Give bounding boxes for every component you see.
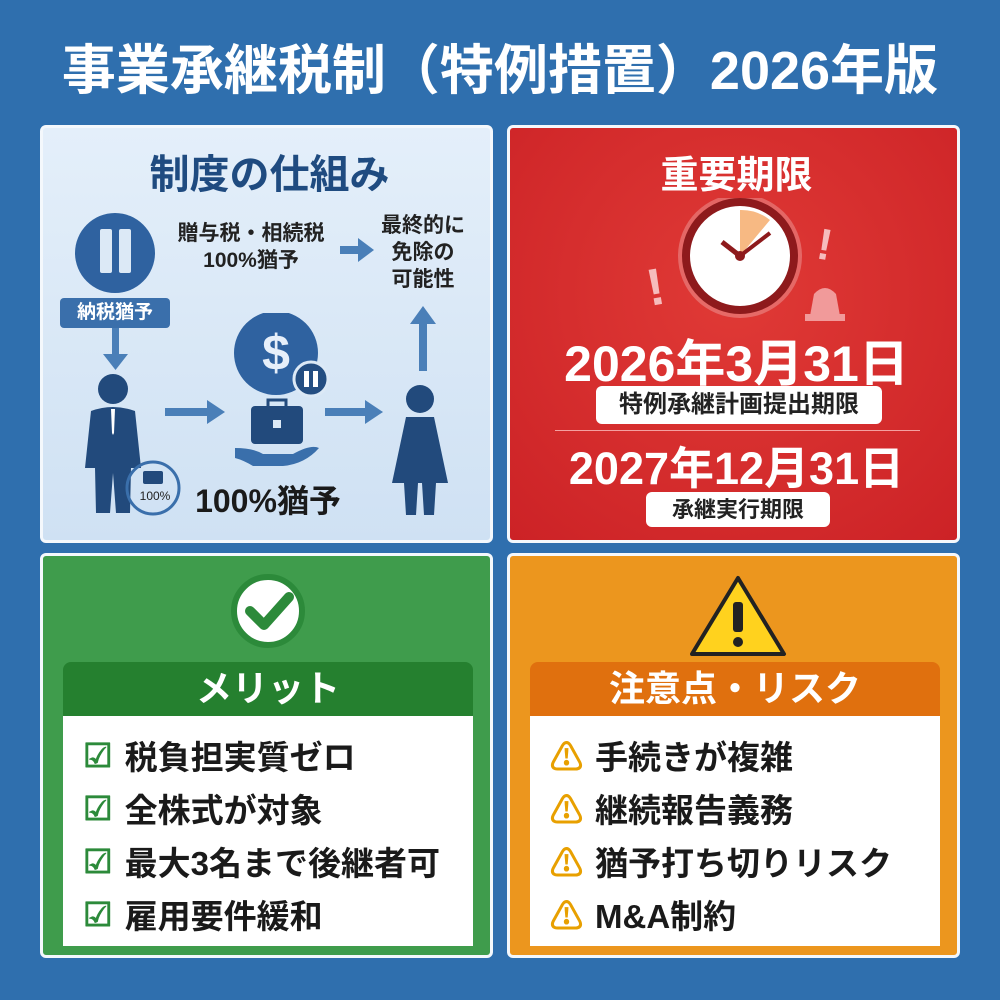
label: execution deadline: 承継実行期限 <box>672 497 804 522</box>
icon: businessman <box>85 374 180 516</box>
arrow: right 2 <box>325 400 383 424</box>
label: execution deadline <box>646 492 830 527</box>
date 1: 2026年3月31日 <box>564 336 909 392</box>
list: risks: ⚠ <box>550 845 583 882</box>
icon: warning triangle <box>690 576 786 656</box>
heading: mechanism: 制度の仕組み <box>150 153 390 197</box>
text: gift/inheritance tax: 贈与税・相続税 <box>178 222 324 245</box>
list: merits: ☑ <box>83 790 113 826</box>
icon: clock with alerts <box>642 198 845 321</box>
panel: deadlines <box>507 125 960 543</box>
header: merits: メリット <box>196 668 340 709</box>
list: merits: ☑ <box>83 842 113 880</box>
icon: clock with alerts: ! <box>642 258 669 318</box>
panel: risks <box>507 553 960 958</box>
header: risks <box>530 662 940 716</box>
header: merits <box>63 662 473 716</box>
icon: dollar coin: $ <box>262 325 290 381</box>
list: risks: ⚠ <box>550 792 583 829</box>
text: 100% deferral: 100%猶予 <box>195 483 341 519</box>
list: merits <box>63 716 473 946</box>
icon: briefcase in hand <box>235 398 319 466</box>
arrow: down <box>103 328 128 370</box>
icon: check circle <box>231 574 305 648</box>
label: tax deferral <box>60 298 170 328</box>
list: merits: 税負担実質ゼロ <box>125 739 356 776</box>
arrow: up <box>410 306 436 371</box>
label: plan submission <box>596 386 882 424</box>
icon: clock with alerts: ! <box>813 220 836 270</box>
heading: deadlines: 重要期限 <box>660 155 812 197</box>
text: exemption possibility: 最終的に <box>381 214 465 237</box>
list: risks: M&A制約 <box>595 898 736 935</box>
label: tax deferral: 納税猶予 <box>77 302 153 323</box>
list: merits: 全株式が対象 <box>125 792 323 829</box>
header: risks: 注意点・リスク <box>609 668 861 709</box>
list: merits: 雇用要件緩和 <box>125 898 323 935</box>
text: gift/inheritance tax <box>178 222 324 272</box>
list: risks: 猶予打ち切りリスク <box>595 845 892 882</box>
panel: merits <box>40 553 493 958</box>
icon: dollar coin <box>234 313 326 395</box>
icon: businessman: 100% <box>140 489 171 503</box>
list: risks: ⚠ <box>550 739 583 776</box>
arrow: right 1 <box>165 400 225 424</box>
list: merits: 最大3名まで後継者可 <box>125 845 440 882</box>
arrow: right top <box>340 238 374 262</box>
title: 事業承継税制（特例措置）2026年版 <box>62 41 938 101</box>
date 2: 2027年12月31日 <box>569 443 904 494</box>
text: gift/inheritance tax: 100%猶予 <box>203 249 299 272</box>
list: risks: 手続きが複雑 <box>595 739 793 776</box>
list: risks <box>530 716 940 946</box>
list: risks: ⚠ <box>550 898 583 935</box>
list: risks: 継続報告義務 <box>595 792 793 829</box>
text: exemption possibility <box>381 214 465 291</box>
list: merits: ☑ <box>83 736 113 774</box>
list: merits: ☑ <box>83 896 113 932</box>
panel: mechanism <box>40 125 493 543</box>
icon: pause circle <box>75 213 155 293</box>
text: exemption possibility: 免除の <box>392 241 454 264</box>
icon: successor woman <box>392 385 448 515</box>
text: exemption possibility: 可能性 <box>392 268 454 291</box>
label: plan submission: 特例承継計画提出期限 <box>619 391 859 418</box>
